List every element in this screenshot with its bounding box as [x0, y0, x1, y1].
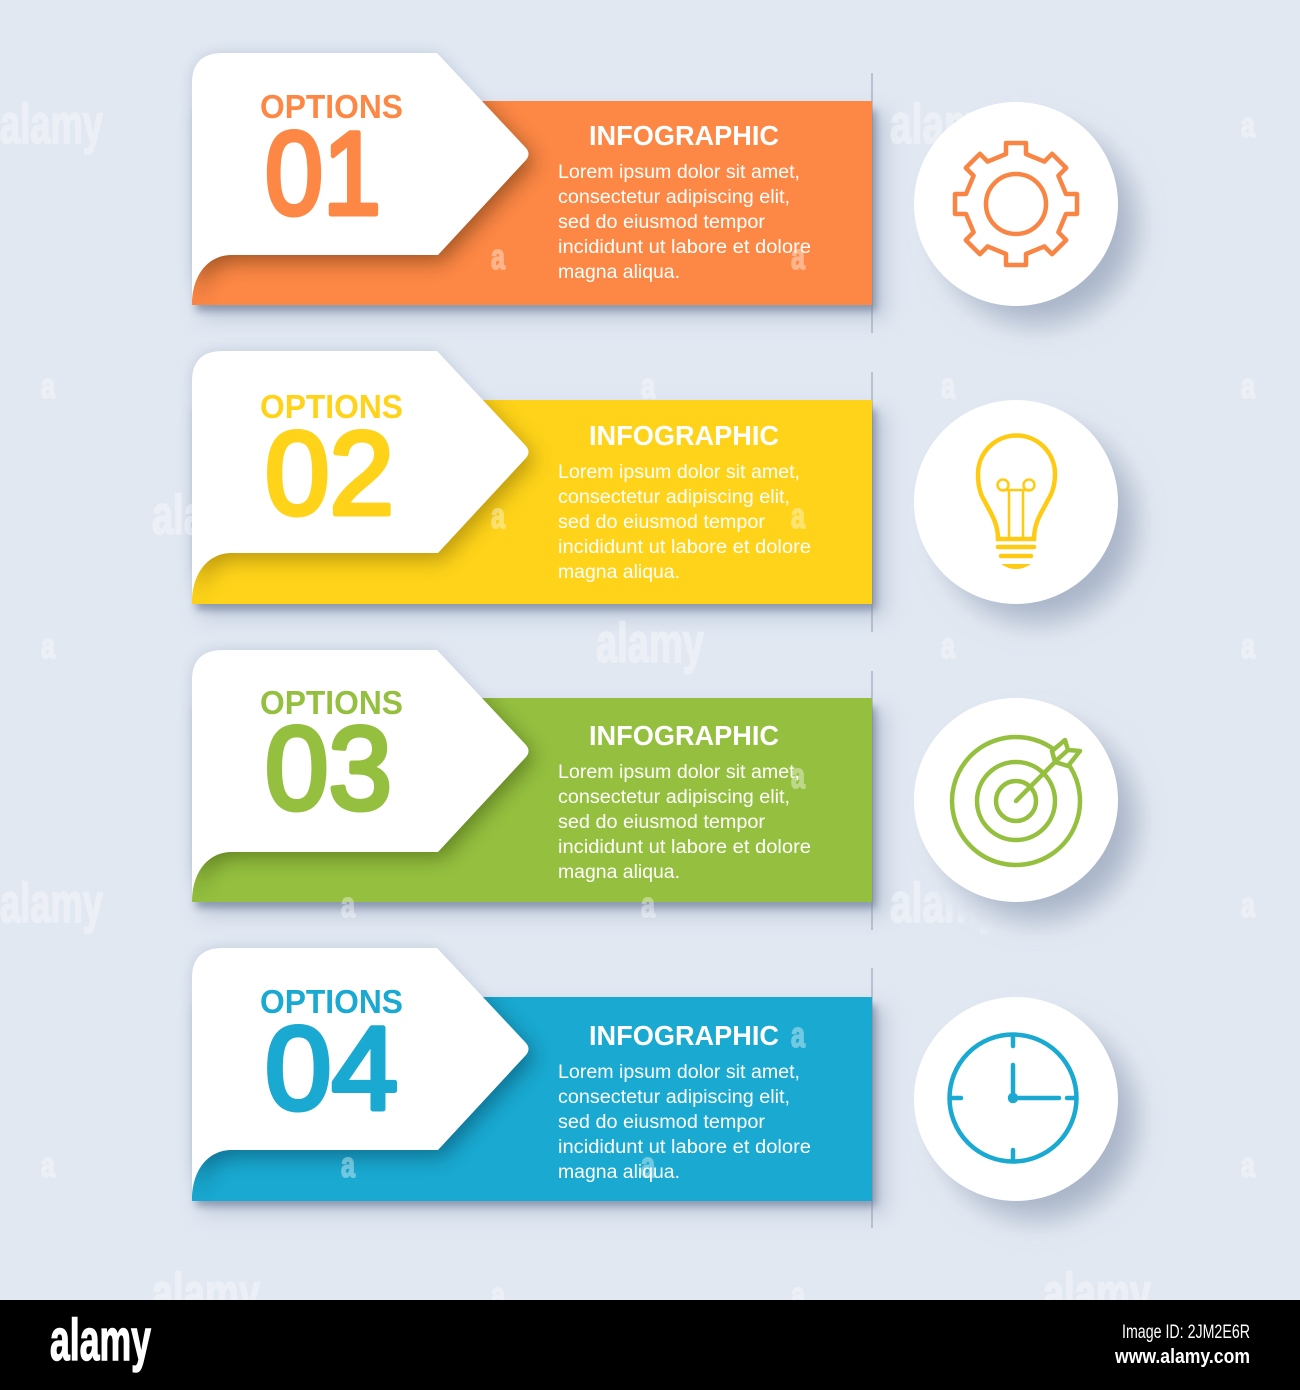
icon: light bulb [978, 436, 1055, 569]
watermarks: a [41, 365, 56, 406]
icon: clock [950, 1034, 1076, 1162]
watermarks: alamy [152, 483, 260, 546]
watermarks: a [1241, 1144, 1256, 1185]
icon: gear [955, 143, 1077, 265]
body text: consectetur adipiscing elit, [558, 187, 790, 208]
white arrow card [192, 650, 528, 902]
watermarks: a [1241, 625, 1256, 666]
watermarks: alamy [890, 92, 1000, 155]
body text [558, 762, 811, 883]
body text [558, 1062, 811, 1183]
watermarks: a [491, 236, 506, 277]
body text: sed do eiusmod tempor [558, 212, 766, 233]
image id: Image ID: 2JM2E6R [1122, 1322, 1250, 1343]
watermarks: a [941, 365, 956, 406]
body text: consectetur adipiscing elit, [558, 487, 790, 508]
number 02: 02 [265, 408, 394, 540]
watermarks: a [1241, 104, 1256, 145]
options label: OPTIONS [260, 88, 403, 125]
watermarks: a [41, 1144, 56, 1185]
watermarks: a [341, 884, 356, 925]
watermarks: a [941, 625, 956, 666]
watermarks: a [791, 236, 806, 277]
body text: incididunt ut labore et dolore [558, 1137, 811, 1158]
heading: INFOGRAPHIC [589, 720, 779, 751]
watermarks: a [791, 755, 806, 796]
body text: magna aliqua. [558, 862, 680, 883]
footer bar [0, 1300, 1300, 1390]
body text: Lorem ipsum dolor sit amet, [558, 762, 800, 783]
icon circle: clock [912, 995, 1160, 1243]
heading: INFOGRAPHIC [589, 1020, 779, 1051]
white arrow card [192, 948, 528, 1200]
watermarks: alamy [1043, 483, 1151, 546]
footer logo: alamy [50, 1308, 151, 1373]
white arrow card [192, 53, 528, 305]
body text: Lorem ipsum dolor sit amet, [558, 1062, 800, 1083]
body text: Lorem ipsum dolor sit amet, [558, 462, 800, 483]
icon circle: target [912, 696, 1160, 944]
watermarks: alamy [0, 92, 103, 155]
watermarks: a [491, 495, 506, 536]
body text: consectetur adipiscing elit, [558, 1087, 790, 1108]
body text: Lorem ipsum dolor sit amet, [558, 162, 800, 183]
panel: option 03 banner [192, 650, 886, 930]
options label: OPTIONS [260, 983, 403, 1020]
panel: option 04 banner [192, 948, 886, 1228]
watermarks: alamy [596, 611, 704, 674]
body text [558, 462, 811, 583]
watermarks: alamy [1043, 1261, 1151, 1324]
body text: sed do eiusmod tempor [558, 512, 766, 533]
body text: sed do eiusmod tempor [558, 812, 766, 833]
panel: option 01 banner [192, 53, 886, 333]
yellow bar [192, 400, 872, 604]
body text: sed do eiusmod tempor [558, 1112, 766, 1133]
panel: option 02 banner [192, 351, 886, 632]
watermarks: alamy [890, 871, 1000, 934]
website: www.alamy.com [1114, 1346, 1250, 1368]
watermarks: a [341, 1144, 356, 1185]
body text: magna aliqua. [558, 1162, 680, 1183]
watermarks: a [791, 495, 806, 536]
heading: INFOGRAPHIC [589, 420, 779, 451]
number 04: 04 [265, 1003, 398, 1135]
watermarks: alamy [0, 871, 103, 934]
watermarks: a [641, 1144, 656, 1185]
body text: incididunt ut labore et dolore [558, 837, 811, 858]
watermarks: a [791, 1014, 806, 1055]
body text: incididunt ut labore et dolore [558, 537, 811, 558]
orange bar [192, 101, 872, 305]
options label: OPTIONS [260, 388, 403, 425]
icon circle: gear [912, 100, 1160, 348]
number 03: 03 [265, 703, 392, 835]
watermarks: a [1241, 365, 1256, 406]
watermarks: a [791, 1274, 806, 1315]
number 01: 01 [265, 108, 381, 240]
options label: OPTIONS [260, 684, 403, 721]
blue bar [192, 997, 872, 1201]
heading: INFOGRAPHIC [589, 120, 779, 151]
watermarks: a [491, 1274, 506, 1315]
watermarks: a [641, 365, 656, 406]
watermarks: a [41, 625, 56, 666]
watermarks: a [641, 884, 656, 925]
white arrow card [192, 351, 528, 603]
green bar [192, 698, 872, 902]
icon circle: light bulb [912, 398, 1160, 646]
icon: target with arrow [952, 737, 1080, 865]
body text: magna aliqua. [558, 562, 680, 583]
body text: magna aliqua. [558, 262, 680, 283]
body text: consectetur adipiscing elit, [558, 787, 790, 808]
watermarks: alamy [152, 1261, 260, 1324]
body text [558, 162, 811, 283]
watermarks: a [1241, 884, 1256, 925]
body text: incididunt ut labore et dolore [558, 237, 811, 258]
